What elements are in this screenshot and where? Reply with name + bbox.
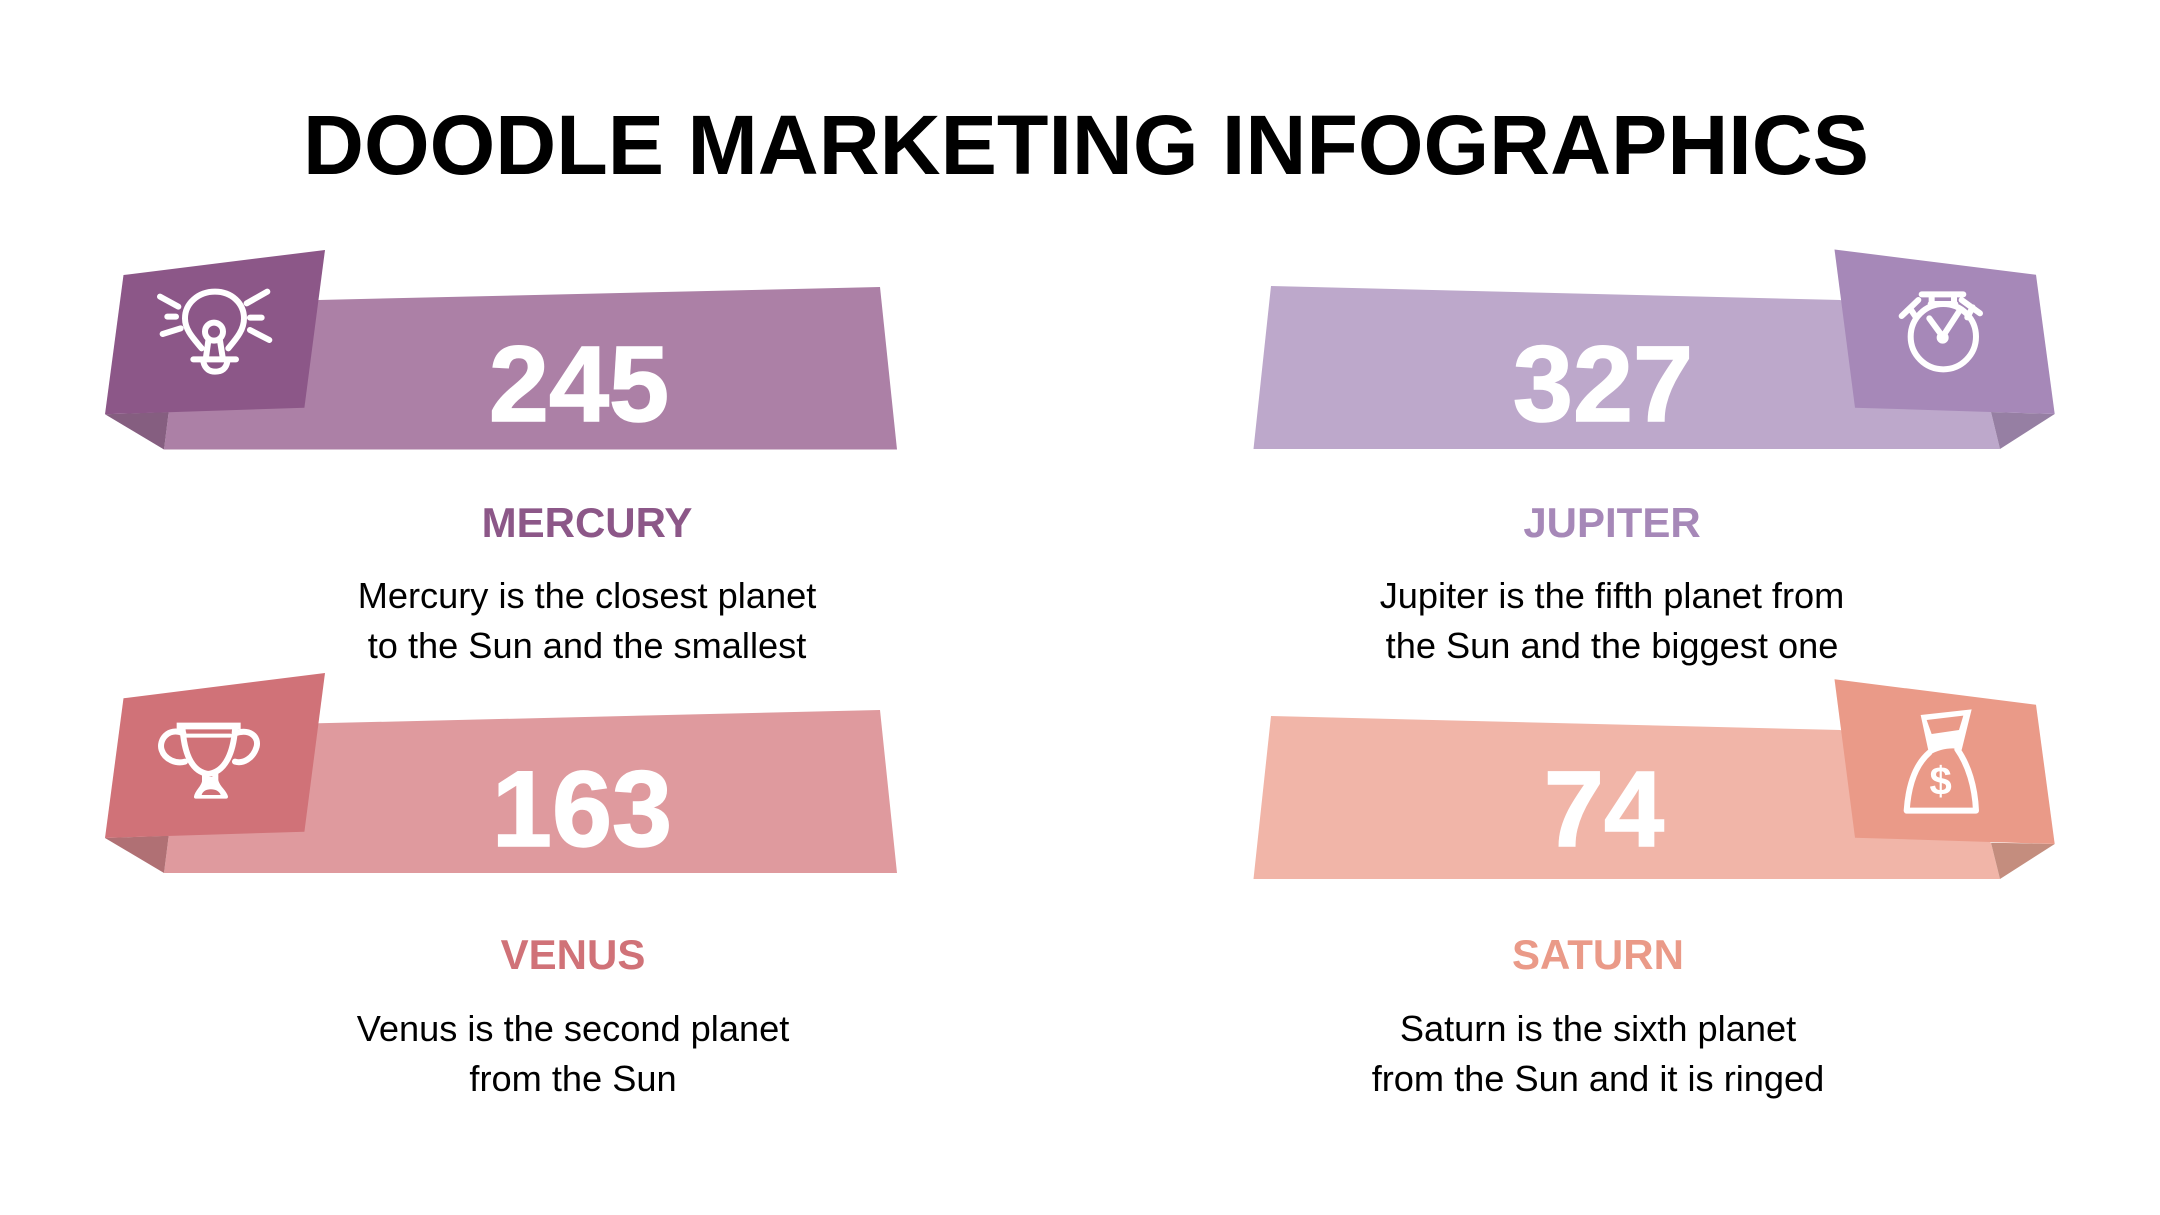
ribbon band: jupiter	[1254, 286, 2000, 449]
heading: jupiter: JUPITER	[1523, 499, 1701, 546]
panel: jupiter	[1254, 250, 2055, 666]
ribbon fold: jupiter	[1991, 412, 2055, 449]
heading: saturn: SATURN	[1512, 931, 1684, 978]
panel: saturn	[1254, 679, 2055, 1099]
panel: venus	[105, 673, 897, 1099]
ribbon band: saturn	[1254, 716, 2000, 879]
description: saturn: Saturn is the sixth planet	[1400, 1008, 1796, 1049]
description: jupiter: the Sun and the biggest one	[1386, 625, 1838, 666]
flag: saturn	[1834, 679, 2055, 844]
description: mercury: Mercury is the closest planet	[358, 575, 816, 616]
flag: venus	[105, 673, 325, 838]
heading: mercury: MERCURY	[482, 499, 692, 546]
value: 327: 327	[1513, 323, 1693, 444]
icon: trophy	[161, 726, 257, 797]
description: jupiter: Jupiter is the fifth planet from	[1380, 575, 1844, 616]
description: venus: from the Sun	[469, 1058, 677, 1099]
title: DOODLE MARKETING INFOGRAPHICS	[303, 98, 1869, 192]
ribbon band: venus	[164, 710, 897, 873]
value: 245: 245	[489, 323, 669, 444]
value: 163: 163	[492, 748, 672, 869]
icon: money bag	[1907, 709, 1976, 811]
ribbon fold: mercury	[105, 412, 169, 450]
description: mercury: to the Sun and the smallest	[368, 625, 806, 666]
flag: jupiter	[1834, 250, 2055, 414]
value: 74: 74	[1544, 748, 1664, 869]
icon: light bulb	[160, 292, 269, 372]
description: saturn: from the Sun and it is ringed	[1372, 1058, 1824, 1099]
ribbon band: mercury	[164, 287, 897, 450]
heading: venus: VENUS	[501, 931, 645, 978]
panel: mercury	[105, 250, 897, 666]
dollar sign: $	[1930, 759, 1952, 803]
ribbon fold: venus	[105, 836, 169, 873]
icon: stopwatch	[1902, 294, 1980, 369]
description: venus: Venus is the second planet	[357, 1008, 789, 1049]
flag: mercury	[105, 250, 325, 414]
ribbon fold: saturn	[1991, 843, 2055, 879]
